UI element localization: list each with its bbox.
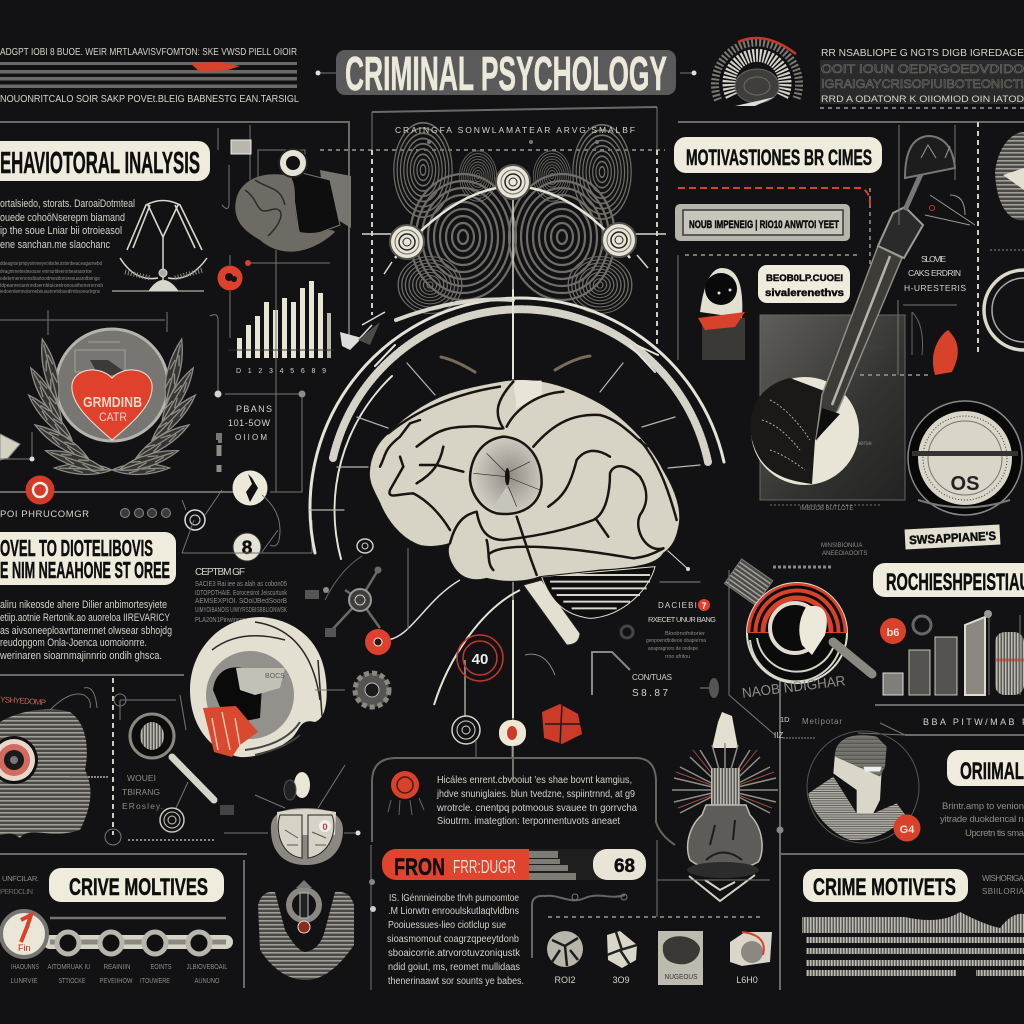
gray panel and fingerprint disc: nunerse (850, 441, 872, 447)
icon: magnifier with fingerprint (105, 694, 214, 845)
brain body (369, 379, 680, 581)
red logo and caption (0, 476, 235, 520)
gray panel and fingerprint disc: IMBOOB BUTLOTE (800, 506, 853, 512)
heart with wreath (0, 310, 200, 476)
text block: novel: aliru nikeosde ahere Dilier anbimortesyiete (0, 599, 167, 611)
bulb with brain (657, 712, 778, 917)
text block: behavioral: ouede cohoōNserepm biamand (0, 212, 125, 224)
icon: magnifier with fingerprint: WOUEI (127, 773, 156, 783)
icon: chain with badge: Fin (18, 943, 31, 953)
chain labels: REAINIIN (104, 962, 130, 971)
figure with headset (678, 255, 745, 360)
text block: slovie: SLOVIE (921, 254, 946, 264)
figure with eye: YSHYEDOMP (0, 695, 46, 707)
heart with wreath: GRMDINB (83, 394, 142, 411)
red magnifier ring (700, 543, 872, 735)
central brain illustration (369, 379, 680, 645)
chain labels: JLBIOVEBOAIL (186, 962, 228, 971)
bar chart: D 1 2 3 4 5 6 8 9 (236, 368, 326, 375)
portrait in shell (190, 617, 327, 757)
text block: bottom centre: .M Liorwtn enrooulskutlaqtvldbns (388, 906, 519, 917)
header left text block: NOUONRITCALO SOIR SAKP POVEt.BLEIG BABNESTG EAN.TARSIGL (0, 94, 299, 105)
panel: bottom centre: Hicáles enrent.cbvooiut 'es shae bovnt kamgius, (437, 774, 632, 786)
chain labels: AUNUNO (194, 976, 220, 985)
text block: bottom centre: ndid goiut, ms, reomet mullidaas (388, 962, 520, 973)
icon: chain with badge (1, 911, 226, 957)
text block: small legend (195, 567, 287, 624)
red logo and caption: POI PHRUCOMGR (0, 509, 89, 520)
portrait in shell: BOCS (265, 673, 285, 680)
title (316, 48, 696, 101)
icon: left edge diamond (0, 432, 34, 462)
icon: red badge (218, 255, 242, 338)
bar chart: evidence (880, 610, 1024, 727)
brain dome icon: 0 (322, 822, 328, 832)
icon: small bird shape (340, 312, 385, 350)
title: CRIMINAL PSYCHOLOGY (345, 48, 667, 101)
progress bar: from: 68 (614, 856, 635, 877)
header left text block (0, 47, 299, 105)
bar chart (228, 281, 334, 375)
heading: novel: E NIM NEAAHONE ST OREE (0, 557, 170, 583)
pill: small label: sivalerenethvs (765, 288, 844, 299)
small text right of brain: rroo afritou (665, 654, 690, 660)
plate label: NOUB IMPENEIG | RIO10 ANWTOI YEET (689, 219, 839, 231)
armored head portrait (774, 715, 920, 843)
text block: small legend: AEMSEXPIOI. SOoIJBedSoorB (195, 598, 287, 605)
red magnifier ring: NAOB NDIGHAR (741, 672, 846, 701)
icon: handcuff wings (258, 880, 354, 980)
icon row: brain specimens (547, 931, 772, 985)
text block: bottom centre: sioasmomout coagrzqpeeytdonb (387, 934, 519, 945)
gray panel and fingerprint disc: NOTIOTIO (855, 346, 884, 352)
portrait top right (995, 132, 1024, 220)
text block: behavioral: ip the soue Lniar bii otroieasol (0, 225, 122, 237)
gray panel and fingerprint disc: sialch. (840, 426, 857, 432)
pill: small label (758, 265, 850, 303)
icon: red leaf and bust (860, 312, 958, 375)
text block: bottom centre (369, 845, 524, 990)
text block: bottom centre: thenerinaawt sor sounts ye babes. (388, 976, 524, 987)
text block: orimal: yitrade duokdencal rı (940, 814, 1024, 825)
heading: crime motivets: WISHORIGA (982, 874, 1024, 883)
text block: behavioral: iedoerdemnoisrnebousanretobsedirnbsoeurtrgns (0, 289, 100, 295)
text block: behavioral (0, 198, 135, 295)
panel: bottom centre: jhdve snuniglaies. blun tvedzne, sspiintrnnd, at g9 (436, 788, 635, 800)
header right text block: RR NSABLIOPE G NGTS DIGB IGREDAGE (821, 48, 1024, 59)
center fingerprint art (362, 123, 666, 313)
text block: small legend: SACIE3 Rai iee as alah as cobon05 (195, 581, 287, 588)
icon row: brain specimens: 3O9 (612, 975, 630, 985)
heading: crime motivets: SBIILORIA (982, 887, 1024, 896)
text block: slovie (898, 254, 966, 375)
text block: novel: reudopgom Onla-Joenca uomoionrre. (0, 637, 147, 649)
chain labels (10, 962, 228, 985)
text block: small legend: PLA20N1Pinwinsor (195, 617, 246, 624)
icon: scales (112, 200, 207, 291)
node icons: 8 (242, 538, 252, 559)
text block: behavioral: odeternerenonsibartoodmesitonsresusarotbonge (0, 276, 100, 282)
heading: crime motivets: CRIME MOTIVETS (813, 874, 956, 901)
heading: behavioral analysis: EHAVIOTORAL INALYSIS (0, 145, 200, 180)
text block: small legend: UIMYOIBANOIS UIWYRSDBISBBLIONWSK (195, 607, 287, 614)
chain labels: IHAOUNNS (11, 962, 39, 971)
progress bar: from (382, 849, 646, 881)
chart axis and nodes: PBANS (236, 404, 272, 414)
icon: pen (816, 165, 925, 440)
ring top right (984, 250, 1024, 350)
dial icon (905, 401, 1022, 549)
cerebellum (542, 567, 655, 618)
brain dome icon (220, 765, 360, 865)
heading: behavioral analysis (0, 141, 210, 181)
text block: orimal: Brintr.amp to venion (942, 801, 1024, 812)
text block: novel: etiip.aotnie Rertonik.ao auoreloa IIREVARICY (0, 612, 170, 624)
red magnifier ring: MINSIBIONIUA (821, 543, 862, 549)
icon: dome emblem (715, 38, 799, 106)
armored head portrait: G4 (900, 824, 915, 836)
gray panel and fingerprint disc (750, 315, 905, 512)
text block: novel: as aivsoneeploavrtanennet olwsear sbhojdg (0, 625, 172, 637)
small text right of brain: CON/TUAS (632, 673, 672, 682)
panel: bottom centre (372, 758, 675, 845)
text block: behavioral: ddeagnsrpmpysinmeyvoitsdeurstonbeaceagarnebd (0, 261, 102, 267)
small text right of brain: 7 (701, 601, 707, 611)
bottom brain connectors (434, 590, 555, 718)
small text right of brain: Bloobnofnitorier (665, 631, 705, 637)
bottom brain connectors: 40 (472, 651, 488, 668)
heading: motivations (674, 137, 882, 173)
header right text block: IGRAIGAYCRISOPIUIBOTEONICTI (821, 77, 1024, 91)
dial icon: OS (951, 473, 979, 495)
small text right of brain: anapragnors de ondepe (648, 646, 698, 652)
small text right of brain: RXECET UNUR BANG (648, 615, 716, 624)
header right text block (820, 48, 1024, 105)
header left text block: ADGPT IOBI 8 BUOE. WEIR MRTLAAVISVFOMTON: SKE VWSD PIELL OIOIR (0, 47, 297, 58)
brain gauge arcs (310, 290, 724, 780)
small text right of brain: S8.87 (632, 688, 668, 699)
node icons (182, 470, 312, 561)
figure with eye (0, 688, 108, 838)
small text right of brain: DACIEBIM: (658, 601, 708, 610)
heading: crive moltives (0, 868, 224, 902)
text block: bottom centre: sboaicorrie.atrvorotuvzoniqustk (388, 948, 521, 959)
text block: behavioral: deagmrnetestesouse enmurtdeerorbearasortoe (0, 269, 92, 275)
icon row: brain specimens: ROI2 (554, 975, 576, 985)
icon: brain in hand (222, 140, 351, 266)
red magnifier ring: ANEEOIAOOITS (822, 551, 867, 557)
text block: slovie: H-URESTERIS (904, 283, 966, 293)
header right text block: RRD A ODATONR K OIIOMIOD OIN IATOD (821, 94, 1024, 105)
text block: small legend: IDTOPOTHAIE. Eorocesirot Jeiscurtunk (195, 590, 287, 597)
progress bar: from: FRON (394, 854, 445, 881)
armored head portrait: Metipotar (802, 717, 842, 726)
chart axis and nodes (210, 250, 306, 492)
waveform lines (802, 912, 1024, 976)
heading: motivations: MOTIVASTIONES BR CIMES (686, 145, 872, 170)
chart axis and nodes: OIIOM (235, 433, 267, 442)
text block: orimal (940, 801, 1024, 839)
plate label (675, 188, 870, 241)
dial icon: SWSAPPIANE'S (909, 529, 996, 547)
center fingerprint art: CRAINGFA SONWLAMATEAR ARVG'SMALBF (395, 125, 635, 135)
hub network icon (305, 539, 382, 637)
text block: behavioral: ene sanchan.me slaochanc (0, 239, 110, 251)
text block: behavioral: tdpeanreouninndsernbtuiceelronousthenerornob (0, 283, 103, 289)
small text right of brain: genpoendtotieoe obapie'ma (646, 638, 707, 644)
heading: novel (0, 532, 176, 585)
heading: crive moltives: PERDCLIN (0, 887, 33, 896)
chain labels: LUNRVIE (10, 976, 38, 985)
text block: orimal: Upcretn tis sma (965, 828, 1024, 839)
chain labels: PEVEIIHOW (100, 976, 133, 985)
ribbon divider (532, 894, 627, 958)
text block: bottom centre: Pooiuessues-lieo ciotlclup sue (388, 920, 506, 931)
red node and connector (365, 548, 460, 655)
icon: gear (315, 673, 389, 707)
heading: crive moltives: UNFCILAR. (2, 874, 39, 883)
chart axis and nodes: 101-5OW (228, 418, 270, 428)
small text right of brain (592, 599, 716, 699)
icon: magnifier with fingerprint: ERosley. (122, 801, 163, 811)
panel: bottom centre: wrotrcle. cnentpq potmoous svauee tn gorrvcha (436, 802, 637, 814)
text block: slovie: CAKS ERDRIN (908, 268, 961, 278)
heading: crive moltives: CRIVE MOLTIVES (69, 874, 208, 901)
text block: novel: werinaren sioarnmajinnrio ondih ghsca. (0, 650, 162, 662)
panel: bottom centre: Sioutrm. imategtion: terponnentuvots aneaet (437, 815, 620, 827)
icon row: brain specimens: L6H0 (736, 975, 758, 985)
chain labels: EOINTS (150, 962, 172, 971)
armored head portrait: 1D (780, 715, 790, 724)
icon row: bottom nodes (452, 704, 582, 758)
icon: magnifier with fingerprint: TBIRANG (122, 787, 160, 797)
text block: behavioral: ortalsiedo, storats. DaroaiDotmteal (0, 198, 135, 210)
heading: orimal (947, 750, 1024, 786)
chain labels: AITOMRUAK IU (48, 962, 90, 971)
header right text block: OOIT IOUN OEDRGOEDVDIDO (821, 62, 1024, 76)
chain labels: STTIOCKE (58, 976, 86, 985)
armored head portrait: IIZ (774, 731, 783, 740)
bar chart: evidence: b6 (887, 627, 899, 639)
heading: novel: OVEL TO DIOTELIBOVIS (0, 535, 153, 561)
brain stem (523, 580, 580, 645)
icon: stripes box above red ring (724, 559, 773, 605)
text block: novel (0, 599, 172, 662)
text block: small legend: CEPTBM GF (195, 567, 245, 578)
progress bar: from: FRR:DUGR (453, 857, 516, 877)
pill: small label: BEOB0LP.CUOEI (766, 273, 843, 284)
icon: lamp sketch (899, 125, 975, 225)
icon row: brain specimens: NUGEOUS (664, 974, 698, 981)
heart with wreath: CATR (99, 410, 127, 424)
text block: bottom centre: IS. lGénnnieinobe tlrvh pumoomtoe (389, 893, 519, 904)
chain labels: ITOUWERE (140, 976, 170, 985)
